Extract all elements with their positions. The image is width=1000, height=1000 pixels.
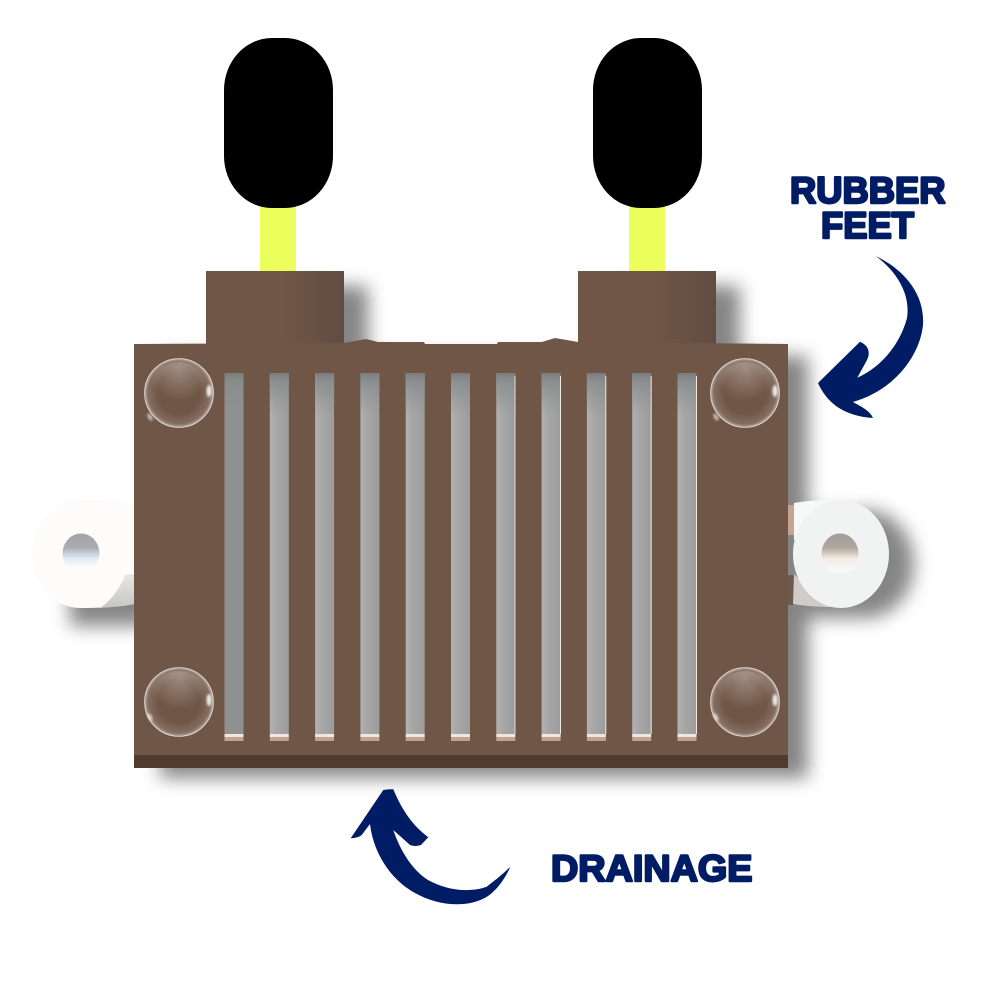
- left mounting lug: [32, 500, 134, 608]
- rubber foot top right: [710, 358, 780, 428]
- label: rubber feet: RUBBER: [790, 169, 946, 211]
- rubber foot bottom right: [710, 668, 780, 736]
- right lug hole: [822, 534, 858, 574]
- rubber foot bottom left: [144, 668, 214, 736]
- rubber foot top left: [144, 358, 214, 428]
- left lug hole: [62, 534, 100, 574]
- brown collar right: [578, 271, 716, 346]
- brown collar left: [206, 271, 344, 346]
- drainage slots: [224, 373, 697, 741]
- yellow stem left: [260, 200, 296, 272]
- enclosure body: [134, 338, 788, 768]
- arrow: drainage: [351, 789, 510, 904]
- right mounting lug: [786, 500, 889, 608]
- arrow: rubber feet: [818, 256, 923, 418]
- black cap left: [224, 38, 333, 208]
- yellow stem right: [629, 200, 665, 272]
- label: rubber feet: [790, 169, 946, 246]
- right toggle switch: [578, 38, 716, 346]
- drop shadow of enclosure: [70, 286, 914, 778]
- label: rubber feet: FEET: [821, 204, 914, 246]
- label: drainage: DRAINAGE: [551, 847, 752, 889]
- black cap right: [593, 38, 702, 208]
- bottom edge: [134, 755, 788, 768]
- left toggle switch: [206, 38, 344, 346]
